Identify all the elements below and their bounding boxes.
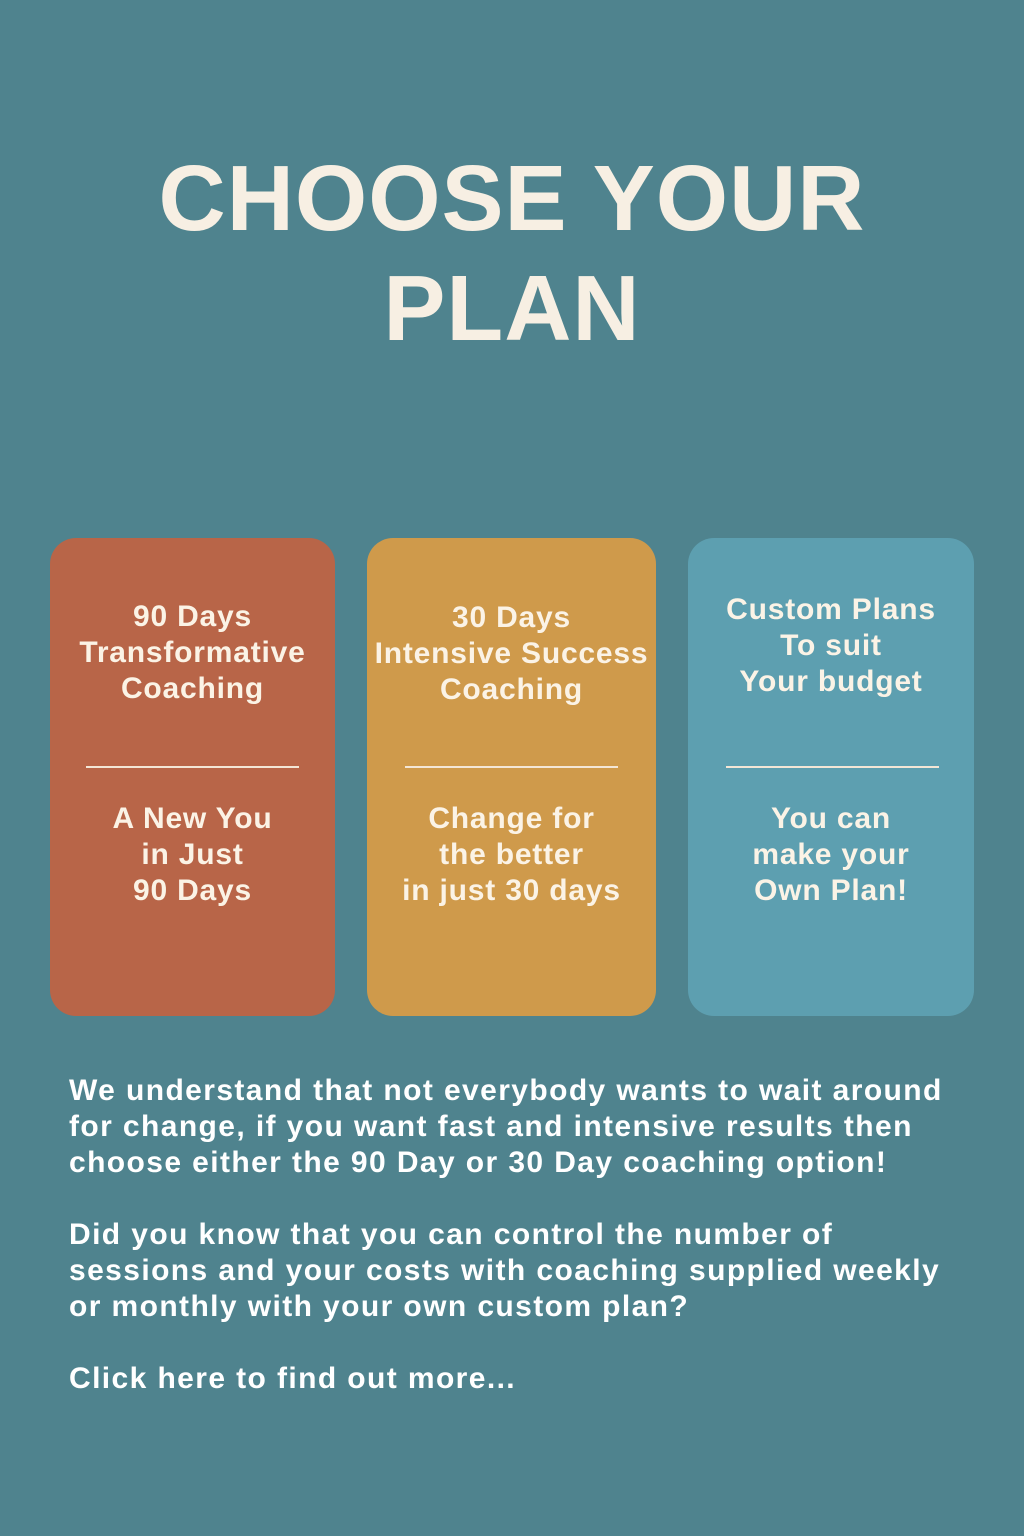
call to action: Click here to find out more... (69, 1362, 516, 1395)
paragraph 1: We understand that not everybody wants to wait around (69, 1074, 943, 1107)
paragraph 2: sessions and your costs with coaching supplied weekly (69, 1254, 940, 1287)
card heading: 90 days: 90 Days (133, 600, 252, 633)
card heading: 30 days: Coaching (440, 673, 583, 706)
card subtext: 30 days: Change for (428, 802, 595, 835)
card heading: custom: To suit (780, 629, 882, 662)
paragraph 1 (69, 1074, 943, 1179)
card heading: 30 days: 30 Days (452, 601, 571, 634)
paragraph 1: for change, if you want fast and intensive results then (69, 1110, 913, 1143)
card: 30 days (367, 538, 656, 1016)
card heading: custom: Your budget (739, 665, 923, 698)
paragraph 1: choose either the 90 Day or 30 Day coaching option! (69, 1146, 887, 1179)
card heading: custom (726, 593, 936, 698)
card subtext: 90 days (112, 802, 272, 907)
card subtext: custom (752, 802, 910, 907)
card heading: 90 days (79, 600, 306, 705)
title: CHOOSE YOUR (159, 146, 865, 250)
card subtext: 30 days (402, 802, 621, 907)
title: PLAN (383, 256, 641, 360)
card: custom (688, 538, 974, 1016)
card heading: 90 days: Coaching (121, 672, 264, 705)
card subtext: 90 days: 90 Days (133, 874, 252, 907)
card heading: 90 days: Transformative (79, 636, 306, 669)
card subtext: custom: Own Plan! (754, 874, 908, 907)
paragraph 2: or monthly with your own custom plan? (69, 1290, 689, 1323)
card subtext: 90 days: in Just (141, 838, 244, 871)
card heading: 30 days (375, 601, 648, 706)
paragraph 2 (69, 1218, 940, 1323)
card: 90 days (50, 538, 335, 1016)
card subtext: custom: You can (771, 802, 891, 835)
paragraph 2: Did you know that you can control the number of (69, 1218, 833, 1251)
card heading: 30 days: Intensive Success (375, 637, 648, 670)
title (159, 146, 865, 360)
card subtext: 30 days: the better (439, 838, 584, 871)
card subtext: 30 days: in just 30 days (402, 874, 621, 907)
card heading: custom: Custom Plans (726, 593, 936, 626)
card subtext: 90 days: A New You (112, 802, 272, 835)
card subtext: custom: make your (752, 838, 910, 871)
